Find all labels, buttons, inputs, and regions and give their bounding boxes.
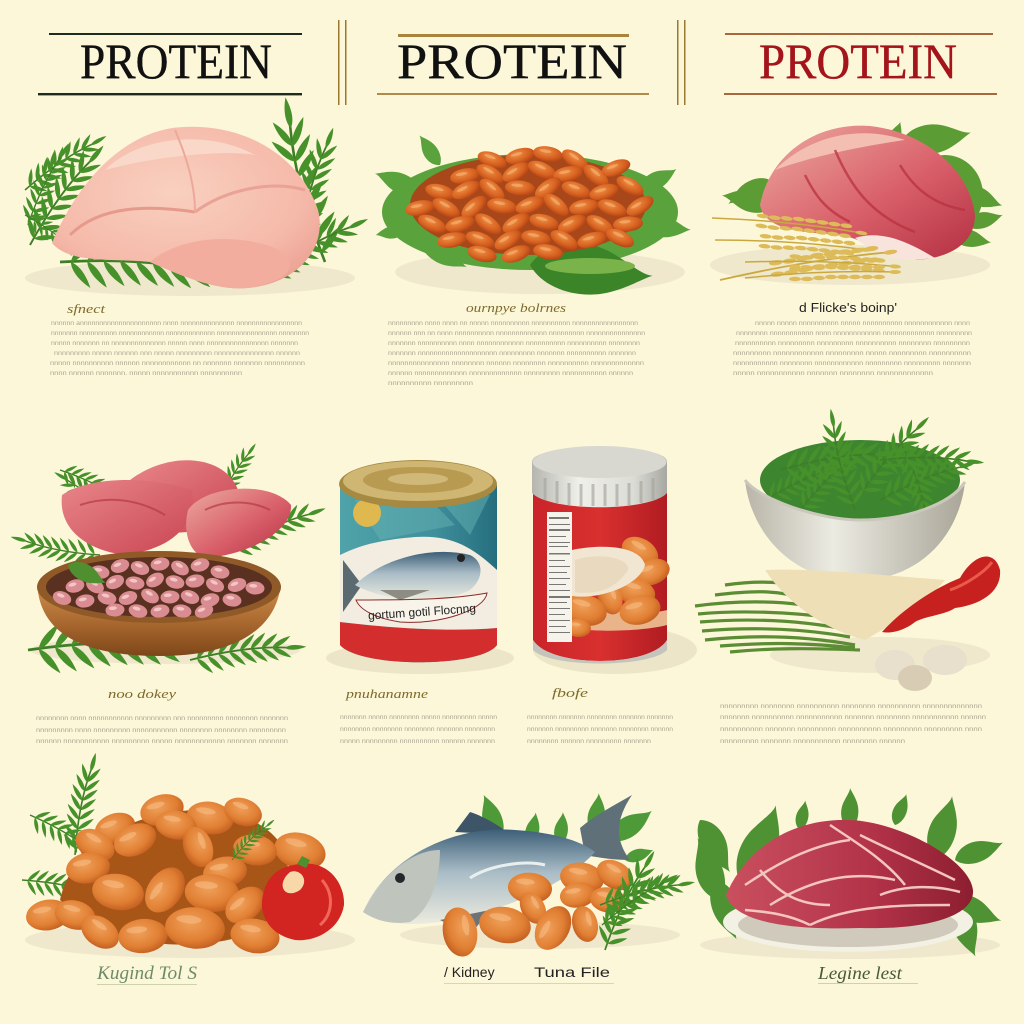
label: panel 3: d Flicke's boinp' xyxy=(799,301,897,315)
text block: panel 1: nnnnn nnnnnnn nn nnnnnnnnnnnnnn nnnnn nnnn nnnnnnnnnnnnnnnn nnnnnnn xyxy=(51,340,298,347)
text block: panel 3 xyxy=(733,320,972,377)
icon: beans xyxy=(439,854,639,959)
icon: can body xyxy=(340,485,497,662)
text: can label xyxy=(356,593,487,623)
icon: white label xyxy=(340,537,497,630)
text block: panel 5 right: nnnnnnnn nnnnnnn nnnnnnnn nnnnnnn nnnnnnn xyxy=(527,714,673,721)
icon: greens in bowl xyxy=(758,405,986,531)
label: panel 5 right: fbofe xyxy=(552,685,588,700)
text block: panel 4: nnnnnnnnn nnnn nnnnnnnnn nnnnnnnnnnn nnnnnnnn nnnnnnnn nnnnnnnnn xyxy=(36,727,286,734)
label: panel 9: Legine lest xyxy=(817,963,903,983)
text block: panel 1: nnnnnnn nnnnnnnnnn nnnnnnnnnnnn nnnnnnnnnnnnn nnnnnnnnnnnnnnnn nnnnnnnn xyxy=(51,330,309,337)
panel: large beans with pepper xyxy=(19,749,355,958)
text block: panel 6: nnnnnnn nnnnnnnnnn nnnnnnnnnnn nnnnnnn nnnnnnnn nnnnnnnnnnn nnnnnn xyxy=(720,714,986,721)
icon: jar window with beans xyxy=(560,531,673,638)
icon: herbs xyxy=(19,749,116,916)
icon: lettuce leaves xyxy=(371,131,692,300)
header: protein column 2: PROTEIN xyxy=(397,33,627,89)
icon: grey bowl xyxy=(745,480,965,581)
text block: panel 4 xyxy=(36,715,288,745)
text block: panel 2: nnnnnn nnn nn nnnn nnnnnnnnnn nnnnnnnnnnnnn nnnnnnnnn nnnnnnnnnnnnnnn xyxy=(388,330,645,337)
text block: panel 5: nnnnn nnnnnnnnn nnnnnnnnnn nnnnnn nnnnnnn xyxy=(340,738,495,745)
divider: left xyxy=(338,20,346,105)
text block: panel 2: nnnnnn nnnnnnnnnnnnn nnnnnnnnnnnnn nnnnnnnnn nnnnnnnnnnn nnnnnn xyxy=(388,370,633,377)
icon: wheat xyxy=(712,205,902,284)
text block: panel 5 xyxy=(340,714,497,745)
icon: plate xyxy=(723,892,973,952)
panel: marbled beef on plate xyxy=(684,788,1006,960)
text block: panel 2: nnnnnnnnn nnnn nnnn nn nnnnn nnnnnnnnnn nnnnnnnnnn nnnnnnnnnnnnnnnnn xyxy=(388,320,638,327)
text block: panel 6: nnnnnnnnn nnnnnnn nnnnnnnnnnn nnnnnnnn nnnnnn xyxy=(720,738,905,745)
icon: red chili xyxy=(882,557,1000,633)
label: panel 2: ournpye bolrnes xyxy=(466,300,566,315)
panel: tuna can xyxy=(326,460,514,674)
icon: meat pieces xyxy=(62,460,291,558)
header: protein column 3: PROTEIN xyxy=(759,33,957,89)
icon: red pepper xyxy=(262,856,344,940)
icon: fern sprigs xyxy=(7,437,333,683)
text block: panel 6: nnnnnnnnn nnnnnnnn nnnnnnnnnn nnnnnnnn nnnnnnnnnn nnnnnnnnnnnnnn xyxy=(720,703,982,710)
text block: panel 1: nnnnnnnnn nnnnn nnnnnn nnn nnnnn nnnnnnnnn nnnnnnnnnnnnnnn nnnnnn xyxy=(54,350,300,357)
icon: meat xyxy=(760,126,975,260)
text block: panel 3: nnnnnnnnn nnnnnnnnnnnn nnnnnnnnn nnnnn nnnnnnnnn nnnnnnnnnn xyxy=(733,350,971,357)
text block: panel 2: nnnnnnnnnnnnnnn nnnnnnnn nnnnnn nnnnnnnn nnnnnnnnnn nnnnnnnnnnnnn xyxy=(388,360,644,367)
icon: jar body xyxy=(533,490,667,661)
icon: fish xyxy=(363,795,632,935)
icon: nutrition label xyxy=(547,512,572,642)
header: protein column 1: PROTEIN xyxy=(80,33,272,89)
text block: panel 5 right: nnnnnnn nnnnnnnnn nnnnnnn nnnnnnnn nnnnnn xyxy=(527,726,673,733)
icon: dill herb xyxy=(585,842,698,958)
icon: leaves xyxy=(684,788,1006,960)
icon: beans xyxy=(404,144,657,266)
icon: fish xyxy=(343,552,481,612)
icon: jar cap xyxy=(532,446,667,507)
text block: panel 6 xyxy=(720,703,986,745)
icon: beans xyxy=(24,790,330,957)
text block: panel 2 xyxy=(388,320,645,387)
panel: red meat with wheat xyxy=(710,118,1006,285)
icon: can bottom band xyxy=(340,622,497,662)
text block: panel 3: nnnnnnnnnnn nnnnnnnn nnnnnnnnnnnn nnnnnnnnn nnnnnnnnn nnnnnnn xyxy=(733,360,971,367)
label: kidney and tuna file xyxy=(444,964,614,984)
label: panel 1: sfnect xyxy=(67,301,105,316)
panel: red jar of beans xyxy=(532,446,697,674)
text block: panel 5 right xyxy=(527,714,673,745)
icon: herb sprigs xyxy=(10,92,378,310)
label: panel 4: noo dokey xyxy=(108,686,176,701)
text block: panel 5: nnnnnnnn nnnnnnnn nnnnnnnn nnnnnnn nnnnnnnn xyxy=(340,726,495,733)
panel: fish with beans and herbs xyxy=(363,792,698,959)
text block: panel 1: nnnnn nnnnnnnnnn nnnnnn nnnnnnnnnnnn nn nnnnnnn nnnnnnn nnnnnnnnnn xyxy=(50,360,305,367)
text block: panel 1: nnnnnn annnnnnnnnnnnnnnnnnnnn nnnn nnnnnnnnnnnnnn nnnnnnnnnnnnnnnnn xyxy=(51,320,302,327)
icon: garlic xyxy=(875,645,967,691)
text block: panel 3: nnnnn nnnnn nnnnnnnnnn nnnnn nnnnnnnnnn nnnnnnnnnnnn nnnn xyxy=(755,320,970,327)
icon: fish fillet xyxy=(765,570,945,640)
label: kidney and tuna file: Tuna File xyxy=(534,964,610,980)
icon: marbled beef xyxy=(726,820,973,928)
text block: panel 4: nnnnnnnn nnnn nnnnnnnnnnn nnnnnnnnn nnn nnnnnnnnn nnnnnnnn nnnnnnn xyxy=(36,715,288,722)
icon: gold medal xyxy=(353,499,381,527)
text: can label: gortum gotil Flocnng xyxy=(368,601,476,623)
panel: meat and bean bowl xyxy=(7,437,333,683)
label: kidney and tuna file: / Kidney xyxy=(444,964,495,980)
text block: panel 2: nnnnnnn nnnnnnnnnn nnnn nnnnnnnnnnnn nnnnnnnnnn nnnnnnnnnn nnnnnnnn xyxy=(388,340,640,347)
text block: panel 1: nnnn nnnnnn nnnnnnn. nnnnn nnnnnnnnnnn nnnnnnnnnn xyxy=(50,370,242,377)
label: panel 5: pnuhanamne xyxy=(345,686,428,701)
icon: long green stalks xyxy=(695,582,860,652)
icon: chicken body xyxy=(52,127,320,288)
text block: panel 5 right: nnnnnnnn nnnnnn nnnnnnnnn nnnnnnn xyxy=(527,738,651,745)
text block: panel 5: nnnnnnn nnnnn nnnnnnnn nnnnn nnnnnnnnn nnnnn xyxy=(340,714,497,721)
divider: right xyxy=(677,20,686,105)
icon: green leaves xyxy=(720,118,1006,251)
icon: can lid xyxy=(339,460,497,508)
icon: pink beans xyxy=(51,556,265,620)
icon: wooden bowl xyxy=(37,551,281,656)
text block: panel 2: nnnnnnnnnn nnnnnnnnn xyxy=(388,380,473,387)
label: panel 7: Kugind Tol S xyxy=(96,963,197,984)
text block: panel 3: nnnnnnnnnn nnnnnnnnn nnnnnnnnn nnnnnnnnnn nnnnnnnn nnnnnnnnn xyxy=(735,340,970,347)
panel: raw chicken illustration xyxy=(10,92,378,310)
text block: panel 2: nnnnnnn nnnnnnnnnnnnnnnnnnnn nnnnnnnnn nnnnnnn nnnnnnnnnn nnnnnnn xyxy=(388,350,636,357)
icon: leaves xyxy=(474,792,658,866)
text block: panel 3: nnnnnnnn nnnnnnnnnnn nnnn nnnnnnnnnnnn nnnnnnnnnnnnn nnnnnnnnn xyxy=(736,330,972,337)
text block: panel 3: nnnnn nnnnnnnnnnn nnnnnnn nnnnnnnn nnnnnnnnnnnnn xyxy=(733,370,933,377)
panel: green bowl, fish and chili xyxy=(695,405,1000,691)
text block: panel 1 xyxy=(50,320,309,377)
icon: herb on beans xyxy=(224,813,282,866)
text block: panel 6: nnnnnnnnnn nnnnnnn nnnnnnnnn nnnnnnnnnn nnnnnnnnn nnnnnnnnn nnnn xyxy=(720,726,982,733)
panel: baked beans on greens xyxy=(371,131,692,300)
text block: panel 4: nnnnnn nnnnnnnnnnn nnnnnnnnn nnnnn nnnnnnnnnnnn nnnnnnn nnnnnnn xyxy=(36,738,288,745)
